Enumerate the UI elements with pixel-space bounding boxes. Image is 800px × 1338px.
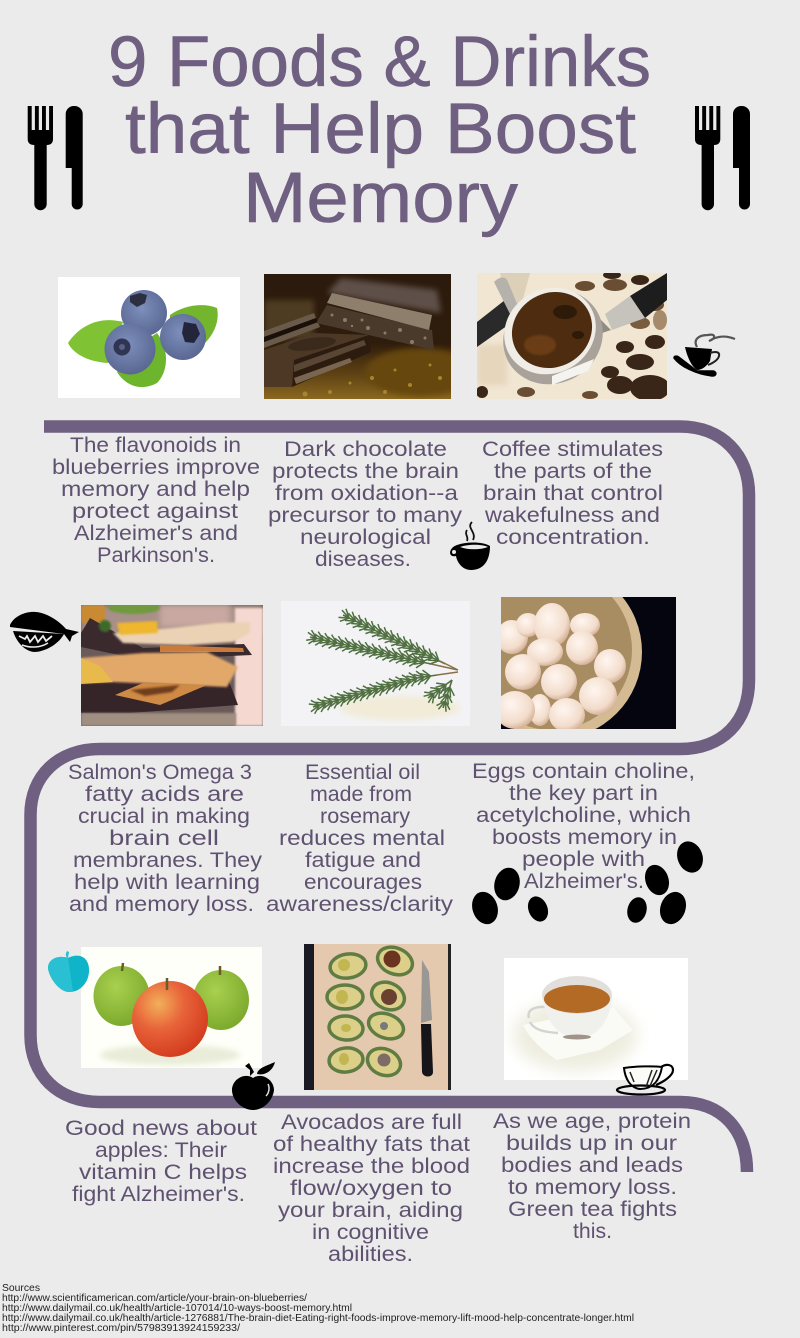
text: apples <box>65 1116 257 1206</box>
text: avocados: in cognitive <box>312 1220 429 1244</box>
text: avocados <box>273 1110 470 1266</box>
text: dark chocolate <box>268 437 462 571</box>
text: avocados: your brain, aiding <box>278 1198 463 1222</box>
title: 9 Foods & Drinks <box>108 23 651 102</box>
text: coffee: wakefulness and <box>484 503 660 527</box>
text: rosemary: rosemary <box>320 804 410 828</box>
text: rosemary: made from <box>310 782 412 806</box>
image: salmon <box>81 602 263 726</box>
text: rosemary: encourages <box>304 870 422 894</box>
text: avocados: Avocados are full <box>281 1110 462 1134</box>
image: green tea <box>504 958 688 1080</box>
text: coffee: Coffee stimulates <box>482 437 663 461</box>
text: dark chocolate: protects the brain <box>272 459 459 483</box>
sources: http://www.dailymail.co.uk/health/article-1276881/The-brain-diet-Eating-right-foods-improve-memory-lift-mood-help-concentrate-longer.html <box>2 1313 634 1324</box>
title: that Help Boost <box>125 90 636 169</box>
title: Memory <box>243 159 519 238</box>
text: blueberries: Alzheimer's and <box>74 521 238 545</box>
text: salmon: help with learning <box>74 870 260 894</box>
text: avocados: increase the blood <box>273 1154 470 1178</box>
icon: egg cluster left <box>468 865 552 928</box>
text: salmon <box>68 760 262 916</box>
text: avocados: flow/oxygen to <box>290 1176 452 1200</box>
text: green tea: Green tea fights <box>508 1197 677 1221</box>
text: green tea: As we age, protein <box>493 1109 691 1133</box>
text: eggs: Eggs contain choline, <box>472 759 695 783</box>
text: dark chocolate: neurological <box>300 525 431 549</box>
text: apples: apples: Their <box>95 1138 227 1162</box>
text: green tea: builds up in our <box>506 1131 677 1155</box>
text: rosemary: reduces mental <box>279 826 445 850</box>
text: green tea <box>493 1109 691 1243</box>
icon: egg cluster right <box>624 838 707 928</box>
sources: http://www.scientificamerican.com/article/your-brain-on-blueberries/ <box>2 1293 307 1304</box>
text: green tea: this. <box>573 1219 612 1243</box>
text: salmon: crucial in making <box>78 804 250 828</box>
text: blueberries: Parkinson's. <box>97 543 215 567</box>
text: dark chocolate: from oxidation--a <box>275 481 458 505</box>
text: rosemary: awareness/clarity <box>266 892 453 916</box>
text: coffee <box>482 437 663 549</box>
text: green tea: bodies and leads <box>501 1153 683 1177</box>
icon: blue apple <box>48 951 89 992</box>
text: apples: Good news about <box>65 1116 257 1140</box>
text: salmon: brain cell <box>109 826 219 850</box>
text: dark chocolate: diseases. <box>315 547 411 571</box>
text: eggs: boosts memory in <box>492 825 677 849</box>
icon: black apple <box>232 1062 275 1110</box>
text: eggs: acetylcholine, which <box>476 803 691 827</box>
text: coffee: the parts of the <box>494 459 652 483</box>
text: salmon: fatty acids are <box>85 782 244 806</box>
image: avocados and knife <box>304 942 451 1090</box>
text: blueberries: memory and help <box>61 477 250 501</box>
icon: fish <box>10 612 79 652</box>
icon: cutlery right <box>695 106 750 210</box>
winding ribbon path <box>30 426 749 1172</box>
text: apples: vitamin C helps <box>79 1160 247 1184</box>
text: apples: fight Alzheimer's. <box>72 1182 245 1206</box>
icon: cutlery left <box>28 106 83 210</box>
text: green tea: to memory loss. <box>508 1175 677 1199</box>
text: eggs: Alzheimer's. <box>524 869 644 893</box>
text: rosemary: fatigue and <box>305 848 421 872</box>
sources <box>2 1283 634 1334</box>
text: eggs: the key part in <box>509 781 658 805</box>
text: salmon: Salmon's Omega 3 <box>68 760 252 784</box>
text: blueberries: blueberries improve <box>52 455 260 479</box>
icon: coffee cup with steam <box>674 335 735 376</box>
text: rosemary <box>266 760 453 916</box>
text: rosemary: Essential oil <box>305 760 420 784</box>
sources: http://www.pinterest.com/pin/57983913924159233/ <box>2 1323 240 1334</box>
text: salmon: and memory loss. <box>69 892 254 916</box>
text: salmon: membranes. They <box>73 848 262 872</box>
sources: http://www.dailymail.co.uk/health/article-107014/10-ways-boost-memory.html <box>2 1303 352 1314</box>
text: dark chocolate: precursor to many <box>268 503 462 527</box>
text: eggs <box>472 759 695 893</box>
image: apples <box>81 947 262 1068</box>
text: blueberries: The flavonoids in <box>70 433 241 457</box>
text: coffee: concentration. <box>496 525 650 549</box>
text: avocados: of healthy fats that <box>273 1132 470 1156</box>
image: coffee portafilter <box>476 271 670 402</box>
icon: mug with steam <box>450 522 490 570</box>
icon: teacup sketch <box>617 1065 673 1094</box>
text: blueberries <box>52 433 260 567</box>
title <box>108 23 651 238</box>
text: eggs: people with <box>522 847 645 871</box>
sources: Sources <box>2 1283 40 1294</box>
text: coffee: brain that control <box>483 481 663 505</box>
text: avocados: abilities. <box>328 1242 413 1266</box>
text: dark chocolate: Dark chocolate <box>284 437 447 461</box>
image: eggs in bowl <box>501 597 676 729</box>
image: rosemary <box>281 601 470 726</box>
image: blueberries <box>58 277 240 398</box>
image: dark chocolate <box>264 274 451 399</box>
text: blueberries: protect against <box>72 499 238 523</box>
